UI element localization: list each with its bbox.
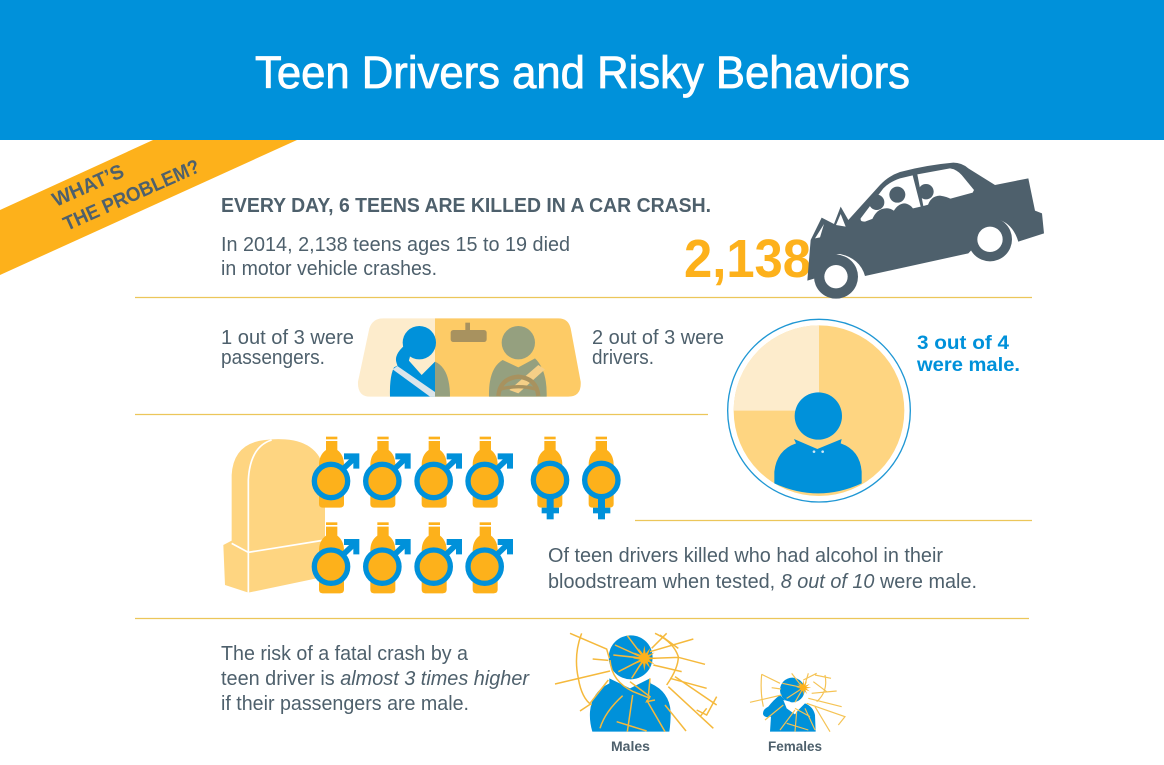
- icon: female figure with shattered glass: [750, 673, 845, 732]
- banner: what's the problem: WHAT’S: [49, 161, 127, 212]
- icon: windshield with passenger and driver: [358, 318, 581, 397]
- text: 3 out of 4 male: 3 out of 4: [917, 333, 1009, 354]
- female bottle 2: [585, 437, 618, 519]
- text: drivers: drivers.: [592, 347, 654, 369]
- male bottle 6: [366, 522, 411, 593]
- text: 2014 statistic: in motor vehicle crashes.: [221, 258, 437, 280]
- icon: male figure with shattered glass: [555, 633, 717, 732]
- label: males: Males: [611, 739, 650, 754]
- male bottle 7: [417, 522, 462, 593]
- divider lines: [135, 298, 1032, 618]
- male bottle 5: [314, 522, 359, 593]
- chart: 3 out of 4 male pie: [728, 319, 910, 502]
- text: fatal crash risk: [221, 643, 530, 715]
- icon: crashed car: [807, 163, 1044, 299]
- text: 3 out of 4 male: [916, 333, 1020, 376]
- text: passengers: passengers.: [221, 347, 325, 369]
- text: 2014 statistic: In 2014, 2,138 teens ages 15 to 19 died: [221, 234, 570, 256]
- banner: what's the problem: [0, 140, 297, 275]
- banner: what's the problem: THE PROBLEM?: [60, 156, 203, 236]
- text: drivers: 2 out of 3 were: [592, 327, 724, 349]
- text: fatal crash risk: The risk of a fatal crash by a: [221, 643, 469, 665]
- text: alcohol statistic: bloodstream when tested, 8 out of 10 were male.: [548, 571, 977, 593]
- female bottle 1: [533, 437, 567, 519]
- text: alcohol statistic: [548, 545, 977, 593]
- text: fatal crash risk: if their passengers are male.: [221, 693, 469, 715]
- label: females: Females: [768, 739, 822, 754]
- header band: [0, 0, 1164, 140]
- text: drivers: [592, 327, 724, 369]
- title: Teen Drivers and Risky Behaviors: [255, 47, 910, 98]
- male bottle 2: [366, 437, 411, 508]
- icons: bottles with gender symbols: [314, 437, 618, 593]
- text: 3 out of 4 male: were male.: [916, 355, 1020, 376]
- text: 2014 statistic: [221, 234, 570, 280]
- heading: every day: EVERY DAY, 6 TEENS ARE KILLED IN A CAR CRASH.: [221, 195, 711, 217]
- male bottle 4: [468, 437, 513, 508]
- number: 2,138: 2,138: [684, 229, 811, 289]
- icon: tombstone: [223, 439, 325, 593]
- male bottle 1: [314, 437, 359, 508]
- male bottle 3: [417, 437, 462, 508]
- text: passengers: 1 out of 3 were: [221, 327, 354, 349]
- text: fatal crash risk: teen driver is almost 3 times higher: [221, 668, 530, 690]
- icon: male figure: [774, 392, 862, 493]
- text: alcohol statistic: Of teen drivers killed who had alcohol in their: [548, 545, 943, 567]
- male bottle 8: [468, 522, 513, 593]
- text: passengers: [221, 327, 354, 369]
